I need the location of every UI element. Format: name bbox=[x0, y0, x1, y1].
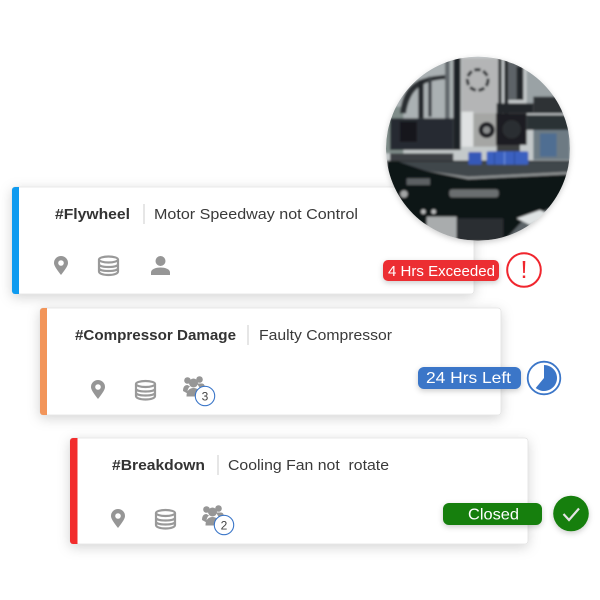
heading: Breakdown: #Breakdown bbox=[112, 458, 205, 474]
icon: group with count 3 bbox=[183, 376, 215, 406]
status: 4 Hrs Exceeded: 4 Hrs Exceeded bbox=[388, 264, 495, 280]
red status bar bbox=[70, 438, 78, 544]
issue description: Motor Speedway not Control bbox=[154, 207, 358, 223]
icon: location pin bbox=[54, 256, 68, 275]
photo: 3D printer in circle bbox=[383, 55, 573, 245]
orange status bar bbox=[40, 308, 47, 415]
panel: Compressor Damage ticket card bbox=[40, 308, 501, 415]
status: Closed: Closed bbox=[468, 506, 519, 524]
icon: group with count 2 bbox=[202, 505, 234, 535]
blue pill bbox=[418, 367, 521, 389]
status: 24 Hrs Left: 24 Hrs Left bbox=[426, 370, 512, 387]
icon: database bbox=[156, 510, 175, 528]
icon: alert circle bbox=[507, 253, 541, 287]
blue status bar bbox=[12, 187, 19, 294]
icon: person bbox=[151, 256, 170, 275]
status: 24 Hrs Left bbox=[418, 362, 560, 394]
icon: group with count 3: 3 bbox=[202, 390, 209, 404]
green pill bbox=[443, 503, 542, 525]
heading: Compressor Damage: #Compressor Damage bbox=[75, 328, 236, 344]
icon: group with count 2: 2 bbox=[221, 518, 228, 532]
status: 4 Hrs Exceeded bbox=[383, 253, 541, 287]
red pill bbox=[383, 260, 499, 281]
icon: clock pie bbox=[528, 362, 560, 394]
icon: location pin bbox=[91, 380, 105, 399]
heading: Flywheel: #Flywheel bbox=[55, 207, 130, 223]
panel: Flywheel ticket card bbox=[12, 187, 474, 294]
issue description: Faulty Compressor bbox=[259, 328, 392, 344]
icon: check circle bbox=[553, 496, 589, 531]
icon: database bbox=[99, 256, 118, 275]
panel: Breakdown ticket card bbox=[70, 438, 528, 544]
icon: database bbox=[136, 381, 155, 400]
issue description: Cooling Fan not rotate bbox=[228, 458, 389, 474]
status: Closed bbox=[443, 496, 589, 531]
icon: location pin bbox=[111, 509, 125, 528]
